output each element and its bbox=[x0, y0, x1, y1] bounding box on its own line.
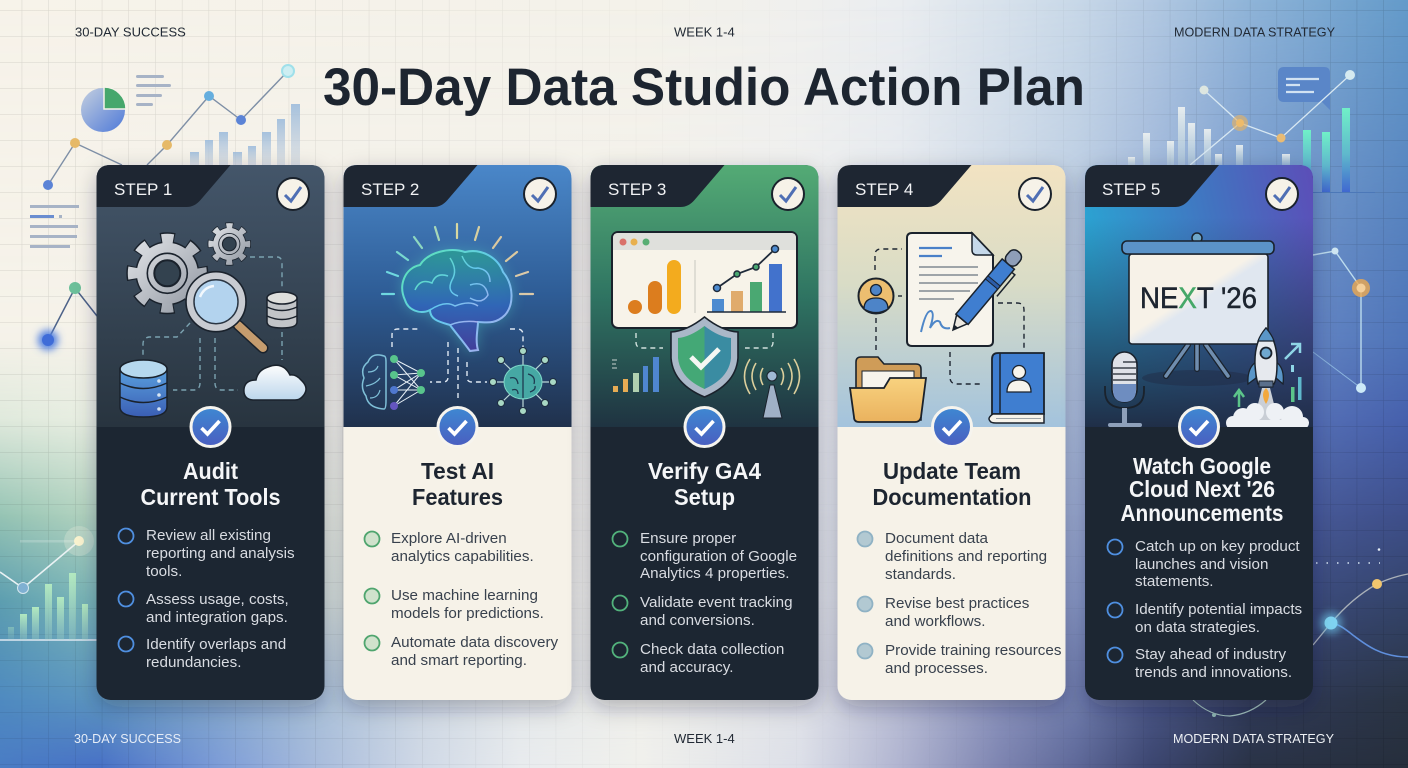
icon: center check bbox=[932, 408, 972, 446]
heading bbox=[140, 458, 280, 510]
heading: Verify GA4 bbox=[648, 458, 761, 484]
panel: step 1 bbox=[96, 165, 324, 700]
decoration: top-right charts bbox=[1128, 67, 1375, 393]
bullet list bbox=[858, 530, 1062, 677]
decoration: top-left charts bbox=[30, 65, 300, 350]
bullet list: Document data bbox=[885, 530, 989, 547]
panel: step 3 bbox=[590, 165, 818, 700]
icon: center check bbox=[685, 408, 724, 446]
bullet list: Use machine learning bbox=[391, 587, 538, 604]
bullet list: configuration of Google bbox=[640, 548, 797, 565]
bullet list: and conversions. bbox=[640, 612, 755, 629]
heading bbox=[1120, 453, 1284, 526]
legend lines bbox=[30, 205, 79, 248]
top labels: WEEK 1-4 bbox=[674, 24, 735, 40]
bullet list: Analytics 4 properties. bbox=[640, 565, 789, 582]
icon: gears, magnifier, databases and cloud bbox=[120, 227, 306, 417]
bullet list: redundancies. bbox=[146, 654, 241, 671]
bullet list: Assess usage, costs, bbox=[146, 591, 289, 608]
bullet list bbox=[612, 530, 797, 676]
bullet list: and integration gaps. bbox=[146, 609, 288, 626]
bullet list: and processes. bbox=[885, 660, 988, 677]
icon: corner check bbox=[1266, 178, 1298, 210]
icon: corner check bbox=[772, 178, 804, 210]
bullet list: Provide training resources bbox=[885, 642, 1062, 659]
bullet list bbox=[118, 527, 295, 671]
bottom labels: MODERN DATA STRATEGY bbox=[1173, 731, 1334, 746]
bullet list: analytics capabilities. bbox=[391, 548, 534, 565]
top labels: 30-DAY SUCCESS bbox=[75, 24, 186, 40]
bullet list: Catch up on key product bbox=[1135, 538, 1300, 555]
bullet list: and accuracy. bbox=[640, 659, 733, 676]
heading: Setup bbox=[674, 484, 735, 510]
bar chart bbox=[190, 104, 300, 166]
icon: analytics window, shield, signal bbox=[612, 232, 800, 418]
node line bbox=[1313, 248, 1370, 393]
bottom labels: WEEK 1-4 bbox=[674, 731, 735, 746]
bullet list: Check data collection bbox=[640, 641, 784, 658]
decoration: lower-right curves bbox=[1193, 548, 1408, 717]
top labels bbox=[75, 24, 1335, 40]
icon: document, pen, folder, book bbox=[850, 233, 1044, 423]
tall teal bars bbox=[1303, 108, 1375, 192]
heading: Test AI bbox=[421, 458, 494, 484]
bullet list bbox=[1108, 538, 1303, 681]
bullet list: on data strategies. bbox=[1135, 619, 1260, 636]
step tag: STEP 5 bbox=[1102, 180, 1160, 199]
bullet list: and smart reporting. bbox=[391, 652, 527, 669]
step tag: STEP 4 bbox=[855, 180, 913, 199]
heading: Features bbox=[412, 484, 503, 510]
title: 30-Day Data Studio Action Plan bbox=[323, 58, 1085, 117]
pie legend lines bbox=[136, 75, 171, 106]
heading: Watch Google bbox=[1133, 453, 1271, 479]
heading bbox=[872, 458, 1032, 510]
step tag bbox=[1085, 165, 1219, 207]
bullet list bbox=[364, 530, 559, 669]
bullet list: and workflows. bbox=[885, 613, 985, 630]
line chart bbox=[1190, 70, 1355, 165]
pie chart bbox=[81, 87, 126, 132]
panel: step 2 bbox=[344, 165, 572, 700]
heading: Current Tools bbox=[140, 484, 280, 510]
bullet list: launches and vision bbox=[1135, 556, 1268, 573]
bullet list: Automate data discovery bbox=[391, 634, 559, 651]
panel: step 5 bbox=[1085, 165, 1313, 700]
bar chart bbox=[1128, 107, 1290, 166]
bullet list: Stay ahead of industry bbox=[1135, 646, 1287, 663]
heading: Cloud Next '26 bbox=[1129, 476, 1275, 502]
icon: center check bbox=[1180, 408, 1218, 446]
bullet list: Review all existing bbox=[146, 527, 271, 544]
bullet list: standards. bbox=[885, 566, 956, 583]
icon: glowing brain with networks bbox=[362, 224, 556, 414]
heading bbox=[648, 458, 761, 510]
bullet list: Identify overlaps and bbox=[146, 636, 286, 653]
decoration: lower-left chart bbox=[0, 526, 97, 640]
bullet list: definitions and reporting bbox=[885, 548, 1047, 565]
bullet list: Ensure proper bbox=[640, 530, 736, 547]
top labels: MODERN DATA STRATEGY bbox=[1174, 24, 1335, 40]
heading: Audit bbox=[183, 458, 238, 484]
bullet list: reporting and analysis bbox=[146, 545, 295, 562]
bullet list: trends and innovations. bbox=[1135, 664, 1292, 681]
step tag bbox=[590, 165, 724, 207]
icon: corner check bbox=[1019, 178, 1051, 210]
heading: Announcements bbox=[1120, 500, 1284, 526]
bullet list: statements. bbox=[1135, 573, 1214, 590]
step tag: STEP 3 bbox=[608, 180, 666, 199]
icon: center check bbox=[438, 408, 477, 446]
icon: corner check bbox=[524, 178, 556, 210]
NEXT '26 logo text: NEXT '26 bbox=[1140, 282, 1257, 315]
step tag: STEP 2 bbox=[361, 180, 419, 199]
panel: step 4 bbox=[838, 165, 1066, 700]
step tag: STEP 1 bbox=[114, 180, 172, 199]
step tag bbox=[838, 165, 972, 207]
step tag bbox=[96, 165, 230, 207]
bullet list: tools. bbox=[146, 563, 182, 580]
bullet list: models for predictions. bbox=[391, 605, 544, 622]
icon: presentation screen, microphone, rocket bbox=[1105, 233, 1309, 430]
bullet list: Validate event tracking bbox=[640, 594, 793, 611]
heading: Documentation bbox=[872, 484, 1032, 510]
bullet list: Revise best practices bbox=[885, 595, 1030, 612]
line chart bbox=[43, 65, 294, 190]
bottom labels bbox=[74, 731, 1334, 746]
heading bbox=[412, 458, 503, 510]
speech bubble bbox=[1278, 67, 1330, 110]
node line bbox=[38, 282, 97, 350]
icon: center check bbox=[191, 408, 230, 446]
step tag bbox=[344, 165, 478, 207]
heading: Update Team bbox=[883, 458, 1021, 484]
icon: corner check bbox=[277, 178, 309, 210]
bullet list: Identify potential impacts bbox=[1135, 601, 1303, 618]
bullet list: Explore AI-driven bbox=[391, 530, 507, 547]
bottom labels: 30-DAY SUCCESS bbox=[74, 731, 181, 746]
